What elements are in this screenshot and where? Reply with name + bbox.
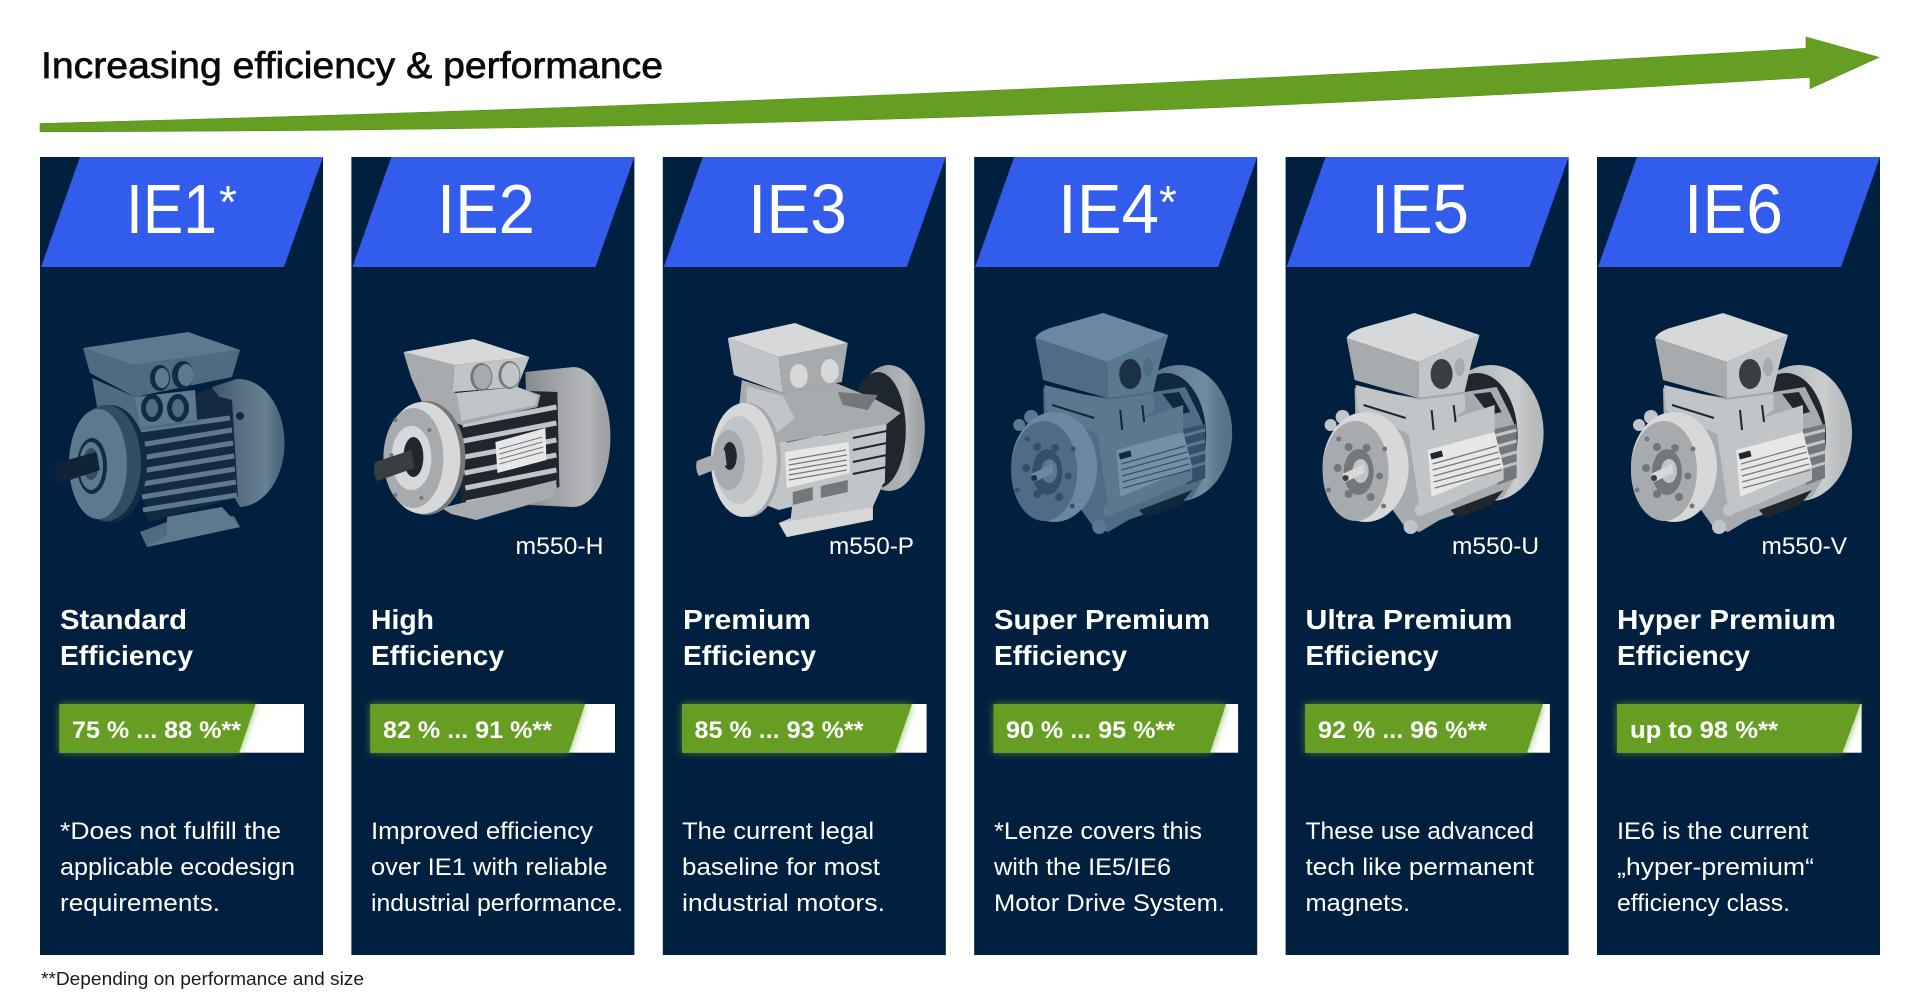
description: industrial performance.: [371, 890, 623, 917]
description: baseline for most: [682, 854, 880, 881]
heading: Ultra Premium Efficiency: [1306, 604, 1512, 671]
heading: Standard Efficiency: Efficiency: [60, 640, 193, 671]
description: over IE1 with reliable: [371, 854, 608, 881]
panel: IE5: [1286, 157, 1569, 955]
badge: IE1: *: [219, 176, 237, 228]
badge: IE6: [1598, 157, 1880, 267]
motor: IE4: [1011, 313, 1232, 534]
description: applicable ecodesign: [60, 854, 295, 881]
efficiency bar: 92–96 %: 92 % ... 96 %**: [1318, 717, 1488, 744]
efficiency bar: 82–91 %: [370, 704, 615, 753]
description: [371, 818, 623, 917]
efficiency bar: 75–88 %: 75 % ... 88 %**: [72, 717, 242, 744]
description: [993, 818, 1225, 917]
badge: IE1: [41, 157, 323, 267]
panel: IE6: [1597, 157, 1880, 955]
arrow: increasing efficiency: [40, 37, 1879, 132]
heading: Premium Efficiency: Efficiency: [683, 640, 816, 671]
description: „hyper-premium“: [1617, 854, 1814, 881]
description: [60, 818, 295, 917]
efficiency bar: 90–95 %: 90 % ... 95 %**: [1006, 717, 1176, 744]
efficiency bar: up to 98 %: [1617, 704, 1862, 753]
efficiency bar: 82–91 %: 82 % ... 91 %**: [383, 717, 553, 744]
heading: Super Premium Efficiency: Efficiency: [994, 640, 1127, 671]
motor: IE1: [54, 332, 285, 547]
heading: Hyper Premium Efficiency: Hyper Premium: [1617, 604, 1836, 635]
description: [682, 818, 885, 917]
heading: Premium Efficiency: [683, 604, 816, 671]
panel: IE1: [40, 157, 323, 955]
heading: High Efficiency: High: [371, 604, 434, 635]
heading: High Efficiency: Efficiency: [371, 640, 504, 671]
badge: IE1: IE1: [126, 170, 217, 248]
description: requirements.: [60, 890, 220, 917]
efficiency bar: 92–96 %: [1305, 704, 1550, 753]
badge: IE3: [664, 157, 946, 267]
description: [1617, 818, 1814, 917]
badge: IE2: [352, 157, 634, 267]
description: These use advanced: [1306, 818, 1534, 845]
motor: m550-P: [696, 323, 925, 537]
description: IE6 is the current: [1617, 818, 1809, 845]
heading: Hyper Premium Efficiency: Efficiency: [1617, 640, 1750, 671]
efficiency bar: 85–93 %: [682, 704, 927, 753]
heading: Hyper Premium Efficiency: [1617, 604, 1836, 671]
description: magnets.: [1306, 890, 1410, 917]
heading: Super Premium Efficiency: [994, 604, 1210, 671]
panel: IE3: [663, 157, 946, 955]
description: efficiency class.: [1617, 890, 1790, 917]
model label: m550-H: [516, 533, 604, 560]
model label: m550-P: [829, 533, 914, 560]
heading: Premium Efficiency: Premium: [683, 604, 811, 635]
heading: Ultra Premium Efficiency: Ultra Premium: [1306, 604, 1512, 635]
efficiency bar: 90–95 %: [994, 704, 1238, 753]
efficiency bar: up to 98 %: up to 98 %**: [1630, 717, 1779, 744]
heading: High Efficiency: [371, 604, 504, 671]
badge: IE3: IE3: [748, 170, 847, 248]
description: The current legal: [682, 818, 874, 845]
panel: IE2: [351, 157, 634, 955]
badge: IE4: *: [1159, 176, 1177, 228]
heading: Standard Efficiency: [60, 604, 193, 671]
description: tech like permanent: [1306, 854, 1534, 881]
efficiency bar: 75–88 %: [59, 704, 304, 753]
title: Increasing efficiency & performance: [41, 45, 663, 86]
heading: Super Premium Efficiency: Super Premium: [994, 604, 1210, 635]
description: industrial motors.: [682, 890, 885, 917]
heading: Standard Efficiency: Standard: [60, 604, 187, 635]
description: Motor Drive System.: [994, 890, 1225, 917]
model label: m550-V: [1762, 533, 1847, 560]
heading: Ultra Premium Efficiency: Efficiency: [1306, 640, 1439, 671]
description: [1306, 818, 1534, 917]
motor: m550-H: [374, 339, 610, 520]
badge: IE4: IE4: [1058, 170, 1159, 248]
description: *Lenze covers this: [994, 818, 1202, 845]
description: *Does not fulfill the: [60, 818, 281, 845]
motor: m550-U: [1323, 313, 1544, 534]
badge: IE4: [975, 157, 1257, 267]
efficiency bar: 85–93 %: 85 % ... 93 %**: [694, 717, 864, 744]
motor: m550-V: [1631, 313, 1852, 534]
badge: IE6: IE6: [1684, 170, 1783, 248]
model label: m550-U: [1452, 533, 1539, 560]
badge: IE5: IE5: [1371, 170, 1469, 248]
badge: IE2: IE2: [437, 170, 535, 248]
footnote: **Depending on performance and size: [41, 969, 364, 989]
description: with the IE5/IE6: [993, 854, 1171, 881]
description: Improved efficiency: [371, 818, 593, 845]
panel: IE4: [974, 157, 1257, 955]
badge: IE5: [1287, 157, 1569, 267]
